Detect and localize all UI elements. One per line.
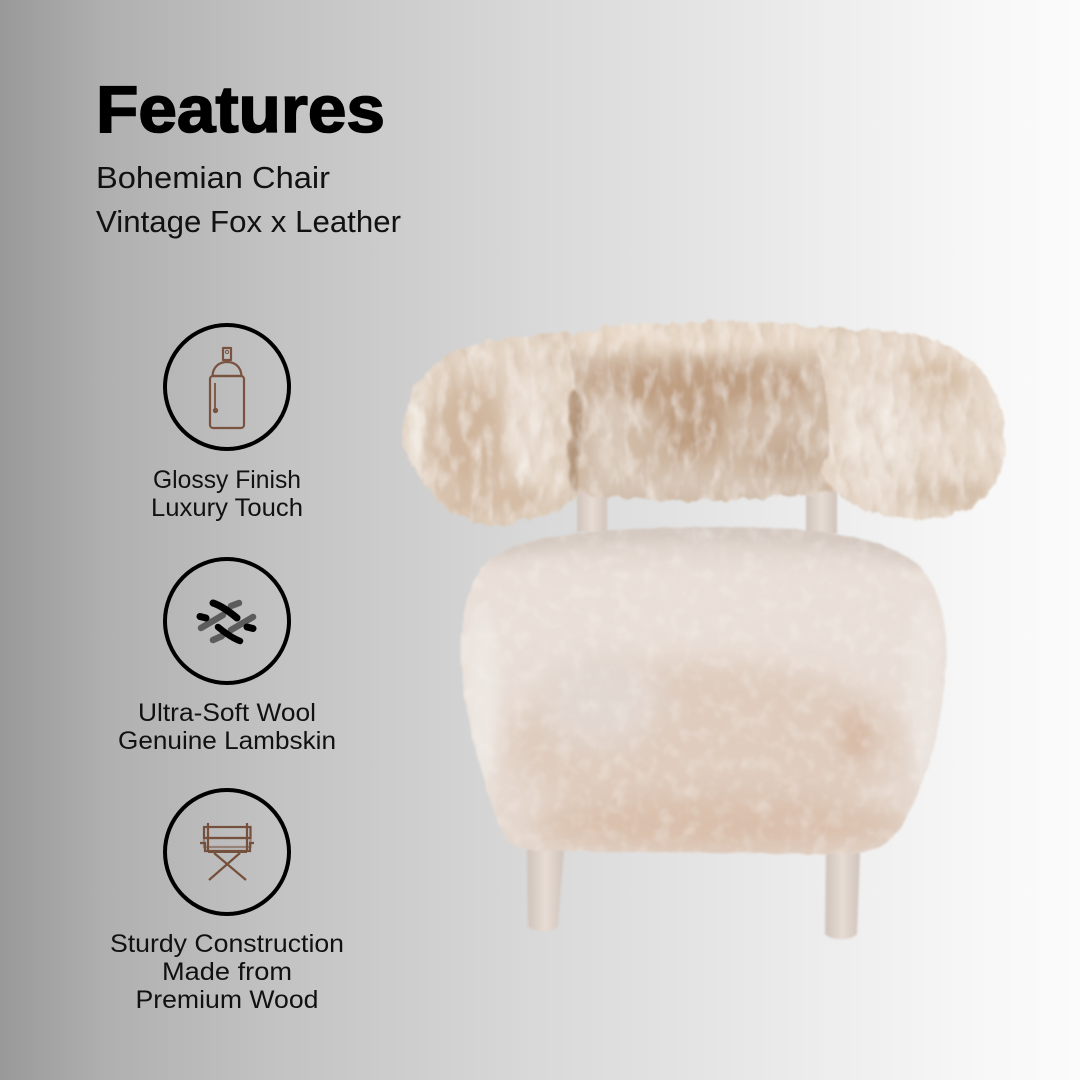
fur: left lobe bbox=[568, 368, 576, 484]
label: sturdy construction: Made from bbox=[162, 958, 292, 986]
chair fur backrest bbox=[395, 310, 1015, 535]
chair seat cushion bbox=[450, 520, 960, 860]
chair front leg right bbox=[825, 852, 860, 939]
title: Features bbox=[96, 72, 385, 146]
subtitle: Vintage Fox x Leather bbox=[96, 204, 401, 239]
label: sturdy construction bbox=[110, 930, 344, 1014]
chair back supports bbox=[577, 485, 837, 534]
label: ultra-soft wool bbox=[118, 699, 336, 755]
label: sturdy construction: Premium Wood bbox=[136, 986, 318, 1014]
fur: right lobe bbox=[816, 330, 1006, 520]
icon: woven strands bbox=[165, 559, 289, 683]
label: glossy finish: Glossy Finish bbox=[153, 466, 301, 494]
label: glossy finish bbox=[151, 466, 303, 522]
icon: spray can bbox=[165, 325, 289, 449]
label: glossy finish: Luxury Touch bbox=[151, 494, 303, 522]
feature: ultra-soft wool bbox=[118, 559, 336, 755]
label: ultra-soft wool: Genuine Lambskin bbox=[118, 727, 336, 755]
subtitle bbox=[96, 160, 401, 239]
feature: glossy finish bbox=[151, 325, 303, 522]
fur: center panel bbox=[569, 348, 833, 502]
label: ultra-soft wool: Ultra-Soft Wool bbox=[138, 699, 316, 727]
label: sturdy construction: Sturdy Construction bbox=[110, 930, 344, 958]
chair photo illustration bbox=[395, 310, 1015, 939]
icon: director chair bbox=[165, 790, 289, 914]
chair front leg left bbox=[527, 848, 564, 931]
feature: sturdy construction bbox=[110, 790, 344, 1014]
subtitle: Bohemian Chair bbox=[96, 160, 330, 195]
